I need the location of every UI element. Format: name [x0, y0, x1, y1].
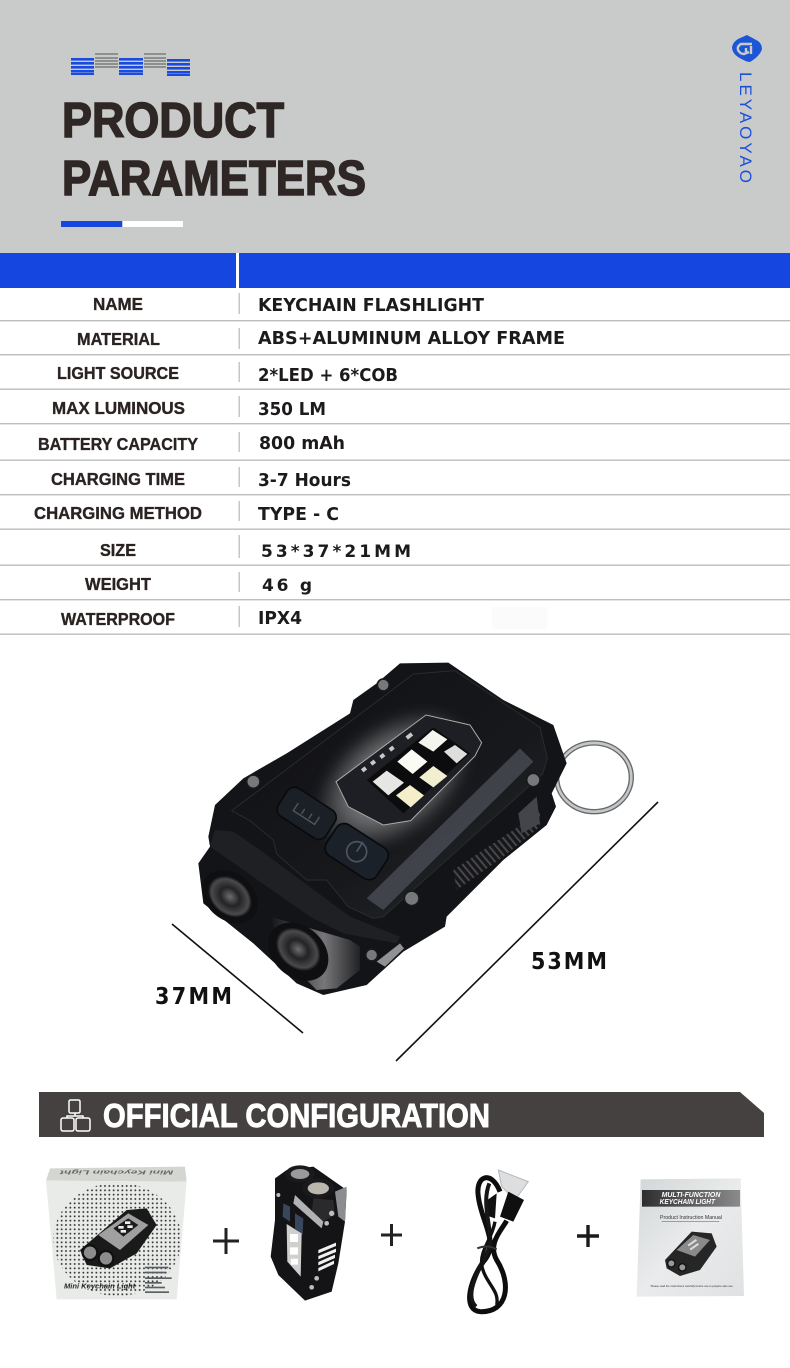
item: USB charging cable: [470, 1170, 528, 1312]
row: light source: [57, 363, 398, 386]
dimension: length label: 53MM: [531, 949, 607, 975]
plus sign 3: [577, 1225, 599, 1247]
flashlight body: [198, 663, 567, 995]
row: weight: [85, 574, 312, 596]
manual artwork: flashlight: [665, 1232, 717, 1276]
icon: key ring: [557, 743, 631, 812]
icon: equalizer bars decoration: [71, 53, 190, 76]
row: waterproof: [61, 608, 302, 629]
control button: power: [322, 820, 392, 883]
row: charging time: 3-7 Hours: [258, 470, 351, 491]
row: waterproof: WATERPROOF: [61, 609, 175, 629]
row: charging time: [51, 469, 351, 491]
row: max luminous: [52, 398, 326, 420]
row: charging method: TYPE - C: [258, 504, 339, 525]
title: PARAMETERS: [62, 152, 366, 206]
panel: grey header: [0, 0, 790, 253]
side ribs: [318, 1243, 336, 1271]
side grip ribs: [453, 810, 540, 890]
row: charging method: [34, 503, 339, 525]
plus sign 2: [381, 1224, 402, 1246]
product photo: keychain flashlight: [192, 663, 631, 995]
front barrel: [270, 917, 360, 990]
small indicator LEDs: [361, 732, 413, 772]
title: PRODUCT: [62, 94, 284, 148]
manual title: KEYCHAIN LIGHT: [660, 1199, 716, 1206]
icon: network hierarchy: [61, 1100, 90, 1131]
row: name: [93, 294, 485, 316]
window highlight streak: [367, 748, 533, 910]
row: charging time: CHARGING TIME: [51, 469, 185, 489]
row: size: [100, 540, 411, 562]
row: material: ABS+ALUMINUM ALLOY FRAME: [258, 328, 565, 349]
manual subtitle: Product Instruction Manual: [660, 1215, 722, 1221]
row: battery capacity: 800 mAh: [259, 433, 345, 454]
row: max luminous: MAX LUMINOUS: [52, 398, 185, 418]
section banner: official configuration: [39, 1092, 764, 1137]
row: battery capacity: BATTERY CAPACITY: [38, 434, 198, 454]
row: size: 53*37*21MM: [261, 542, 411, 562]
brand name: LEYAOYAO: [736, 72, 755, 183]
black LED carrier strips: [367, 727, 470, 813]
item: instruction manual: [637, 1178, 744, 1297]
row: size: SIZE: [100, 540, 136, 560]
icon: brand logo: [732, 35, 762, 62]
row: material: [77, 328, 565, 349]
item: flashlight upright: [271, 1165, 347, 1301]
row: battery capacity: [38, 433, 345, 454]
control button: mode: [274, 784, 340, 843]
row: charging method: CHARGING METHOD: [34, 503, 202, 523]
row: weight: WEIGHT: [85, 574, 151, 594]
table header band: [0, 253, 790, 288]
top window panel: [232, 671, 547, 918]
item: retail box: Mini Keychain Light: [58, 1169, 173, 1175]
LED chips: [373, 730, 467, 807]
manual title: [660, 1192, 721, 1206]
dimension: width line: [172, 924, 303, 1033]
row: material: MATERIAL: [77, 329, 160, 349]
box artwork: flashlight: [80, 1208, 157, 1268]
manual title: MULTI-FUNCTION: [662, 1192, 721, 1199]
box caption: Mini Keychain Light: [64, 1282, 136, 1291]
manual footnote: Please read the instructions carefully before use to prepare safe use.: [651, 1284, 734, 1288]
row: light source: 2*LED + 6*COB: [258, 365, 398, 386]
lens: left: [192, 859, 268, 934]
lens: right: [257, 911, 340, 993]
row: max luminous: 350 LM: [258, 399, 326, 420]
item: retail box: [46, 1167, 187, 1299]
dimension: length line: [396, 802, 658, 1061]
front frame edge: [210, 830, 400, 943]
row: weight: 46 g: [262, 576, 312, 596]
panel: parameter table: [0, 293, 790, 635]
row: name: NAME: [93, 294, 143, 314]
clip hardware: [377, 943, 404, 967]
dimension: width label: 37MM: [155, 984, 232, 1010]
row: light source: LIGHT SOURCE: [57, 363, 179, 383]
plus sign 1: [213, 1228, 239, 1254]
banner heading: OFFICIAL CONFIGURATION: [103, 1097, 490, 1134]
title: [62, 94, 366, 206]
LED board: [336, 715, 482, 825]
frame screws: [247, 679, 540, 961]
LED glow: [288, 680, 499, 880]
row: name: KEYCHAIN FLASHLIGHT: [258, 295, 485, 316]
title underline: [61, 221, 183, 227]
row: waterproof: IPX4: [258, 608, 302, 629]
